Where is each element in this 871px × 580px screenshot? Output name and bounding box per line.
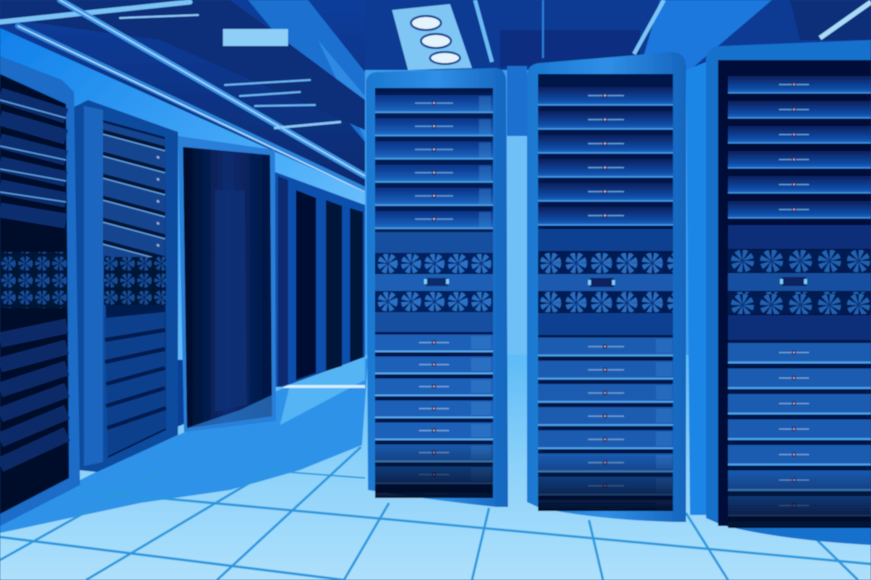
back wall (365, 66, 871, 380)
blank panel lower (538, 313, 673, 335)
soffit above left racks (0, 28, 365, 360)
ceiling pipes (0, 0, 365, 192)
glass door rack (178, 136, 276, 432)
status strip (375, 274, 493, 291)
fan band (0, 252, 67, 308)
ceiling light fixture (392, 4, 472, 70)
fan band (104, 257, 166, 305)
rack units lower (105, 312, 166, 456)
lower units (375, 332, 493, 486)
blank panel (728, 225, 871, 249)
floor (0, 355, 871, 580)
status strip (538, 274, 673, 291)
fans lower (376, 292, 493, 311)
rack units upper (0, 95, 66, 221)
fans (728, 250, 871, 272)
upper units (375, 92, 493, 231)
lower units (538, 335, 673, 509)
lower units (728, 340, 871, 526)
rack units lower (0, 326, 67, 465)
server rack right of centre (527, 52, 686, 522)
left rack two (72, 100, 178, 472)
status strip (728, 273, 871, 291)
ceiling (0, 0, 871, 190)
fans lower (728, 292, 871, 314)
upper units (538, 84, 673, 228)
wall between racks (686, 62, 706, 515)
server rack far right (706, 40, 871, 545)
bottom shade (728, 470, 871, 528)
floor shadow (0, 358, 368, 533)
bottom shade (375, 440, 493, 498)
rack units upper (103, 123, 165, 271)
ceiling light box (223, 29, 288, 46)
fans (538, 253, 673, 273)
floor tile lines (0, 410, 871, 580)
blank panel lower (728, 315, 871, 340)
upper units (728, 72, 871, 224)
blank panel (538, 229, 673, 251)
blank panel (375, 232, 493, 253)
far racks row (275, 172, 365, 387)
server rack centre (366, 68, 508, 507)
blank panel lower (375, 312, 493, 332)
bottom shade (538, 455, 673, 511)
fans (376, 254, 493, 273)
left rack one (0, 56, 80, 526)
unit highlights (0, 100, 66, 202)
fans lower (538, 292, 673, 312)
